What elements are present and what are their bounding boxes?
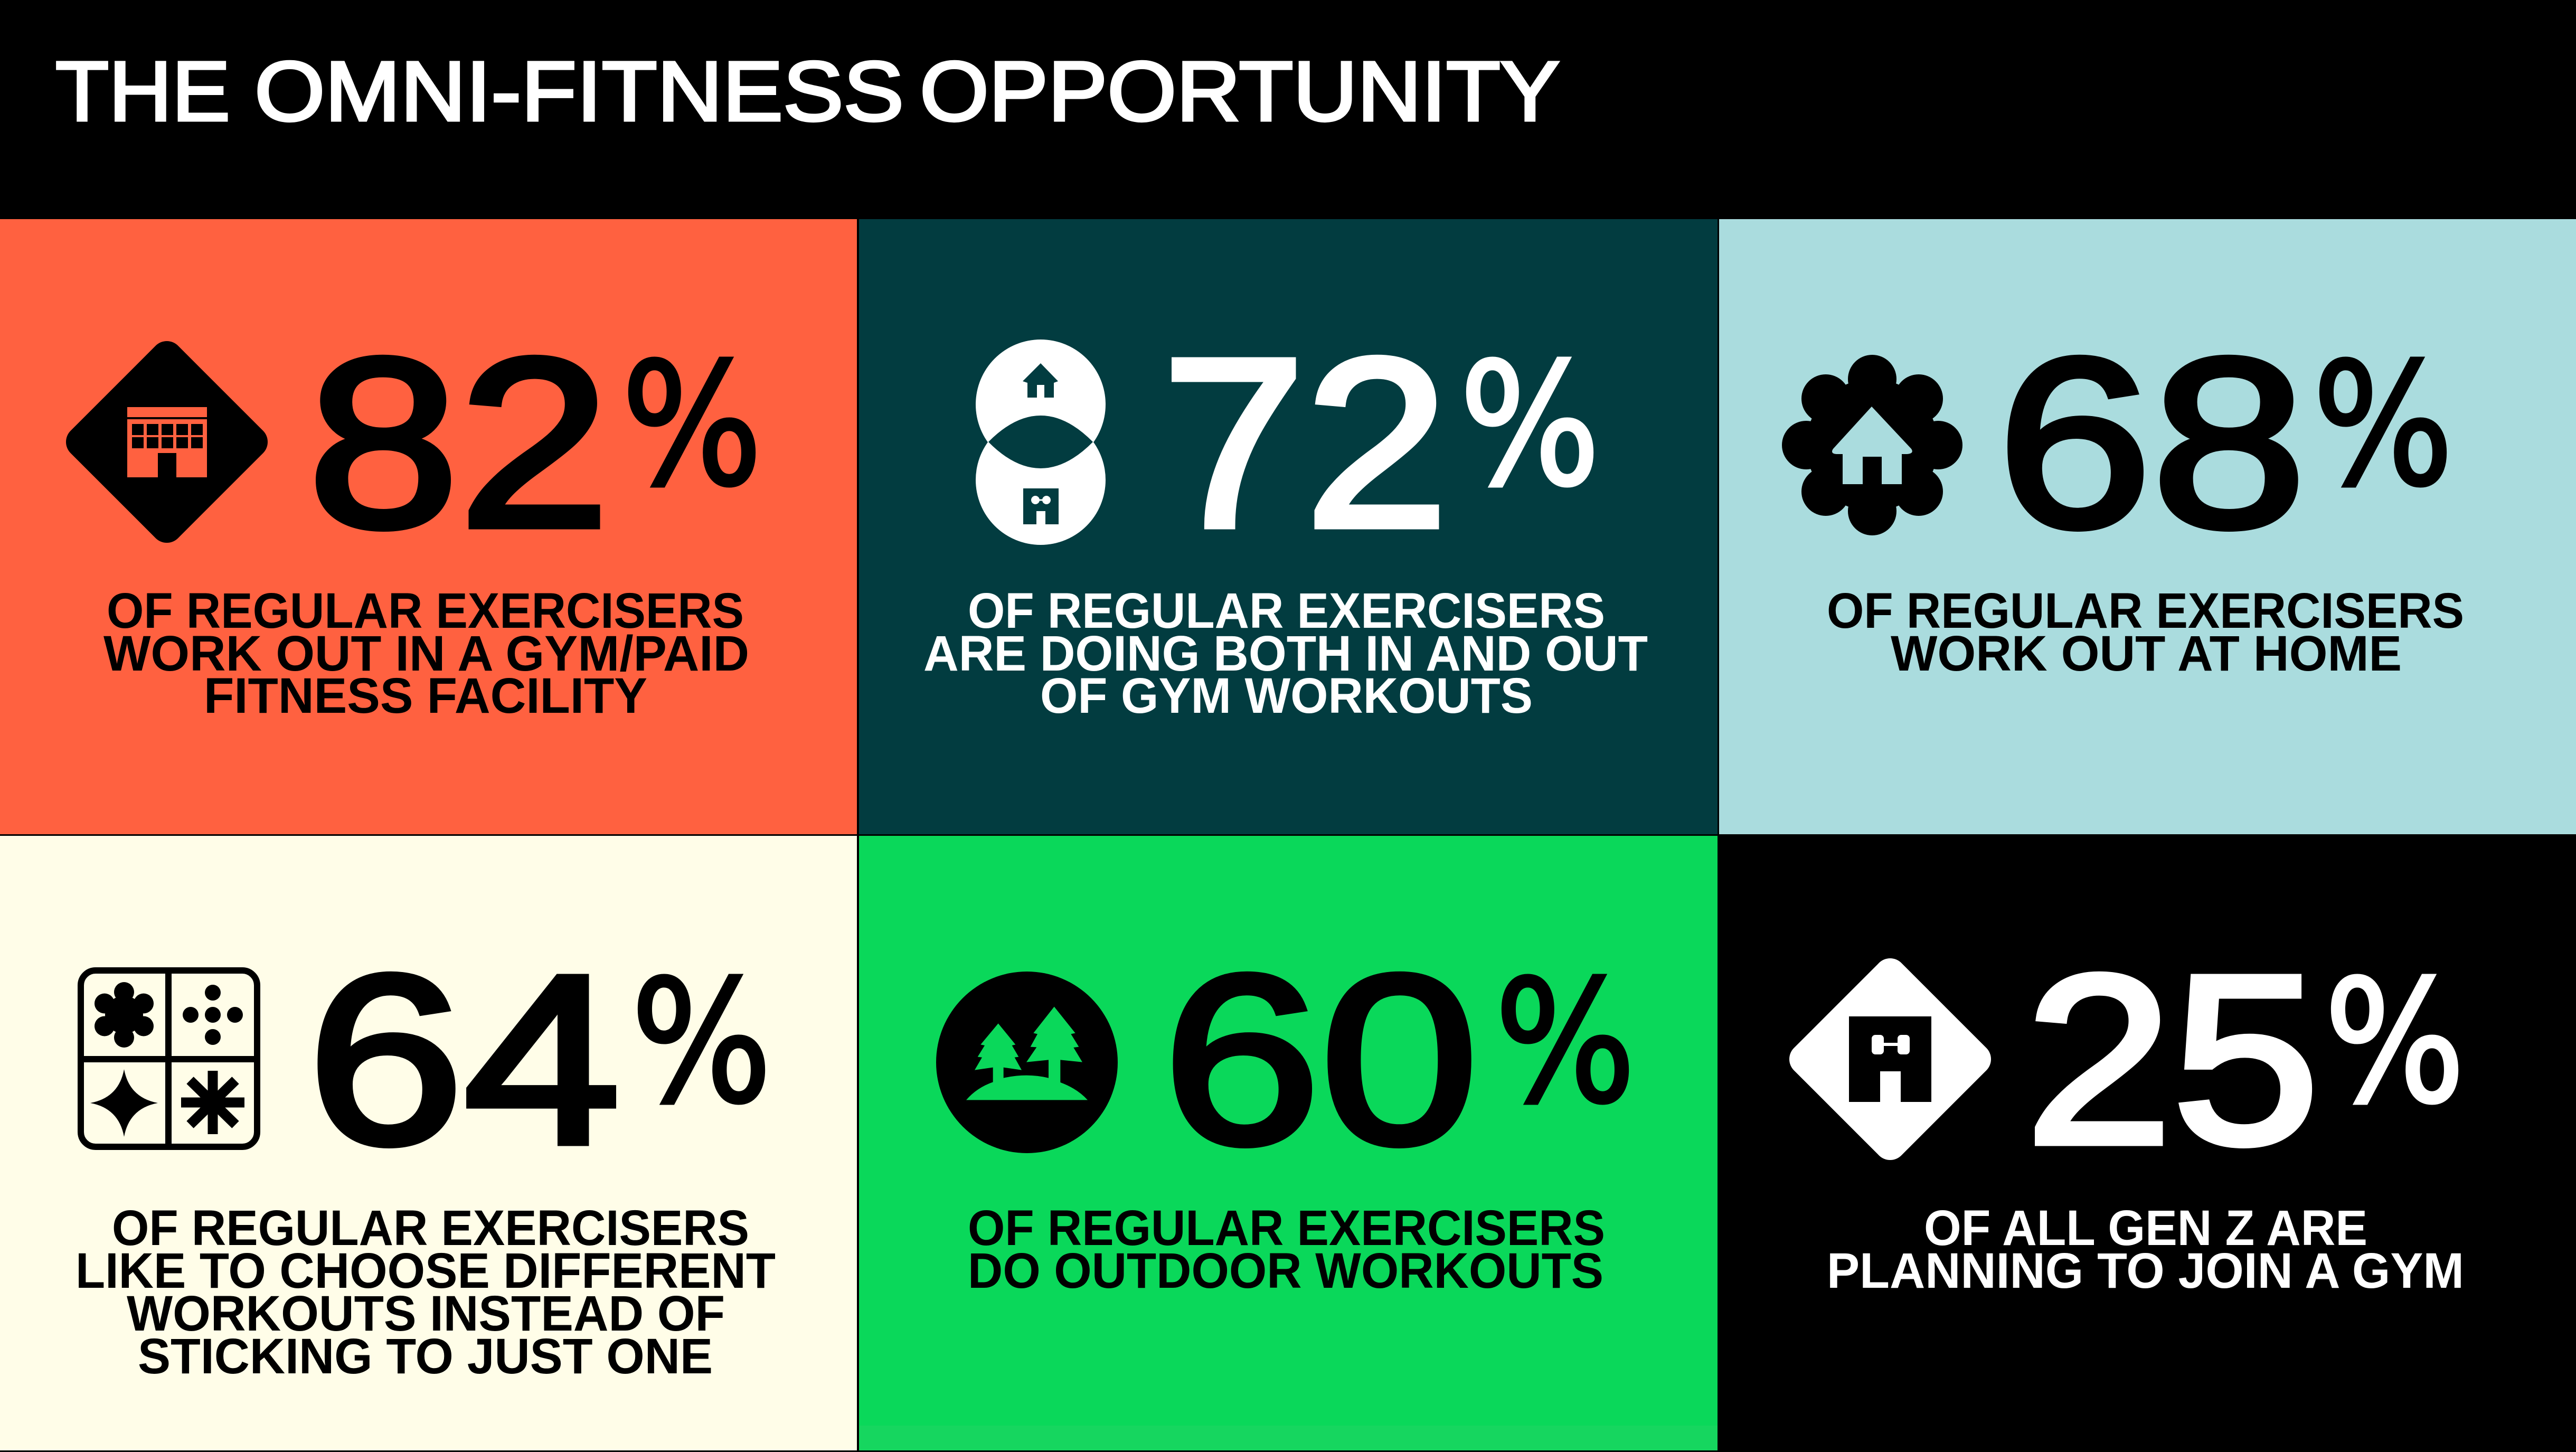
- percent sign: %: [621, 327, 762, 524]
- icon: flower with house: [1782, 355, 1962, 535]
- panel: 60% outdoor: [859, 836, 1718, 1450]
- statistic: 68: 68: [1997, 309, 2306, 577]
- panel: 25% Gen Z: [1719, 836, 2576, 1450]
- caption: [76, 1200, 776, 1384]
- caption: [103, 583, 749, 724]
- icon: gym building diamond: [82, 357, 252, 527]
- percent sign: %: [2324, 945, 2465, 1141]
- caption: ARE DOING BOTH IN AND OUT: [923, 626, 1648, 682]
- caption: WORKOUTS INSTEAD OF: [127, 1286, 725, 1342]
- caption: OF ALL GEN Z ARE: [1924, 1200, 2367, 1256]
- caption: [968, 1200, 1605, 1299]
- caption: [1827, 1200, 2464, 1299]
- statistic: 60: 60: [1163, 926, 1478, 1194]
- title: [55, 44, 1560, 138]
- caption: WORK OUT AT HOME: [1891, 626, 2402, 682]
- caption: [923, 583, 1648, 724]
- statistic: 82: 82: [308, 309, 610, 577]
- statistic: 64: 64: [307, 926, 620, 1194]
- caption: [1827, 583, 2464, 682]
- icon: gym diamond: [1805, 974, 1975, 1144]
- caption: OF REGULAR EXERCISERS: [968, 1200, 1605, 1256]
- title: OPPORTUNITY: [920, 44, 1560, 138]
- icon: four-part grid of shapes: [78, 967, 260, 1150]
- caption: DO OUTDOOR WORKOUTS: [968, 1243, 1603, 1299]
- percent sign: %: [1495, 945, 1636, 1141]
- panel: 64% variety: [0, 836, 857, 1450]
- caption: FITNESS FACILITY: [204, 668, 647, 724]
- caption: PLANNING TO JOIN A GYM: [1827, 1243, 2464, 1299]
- icon: venn of home and gym: [976, 340, 1106, 545]
- icon: trees in circle: [936, 972, 1118, 1153]
- statistic: 25: 25: [2025, 926, 2319, 1194]
- caption: OF REGULAR EXERCISERS: [107, 583, 744, 639]
- percent sign: %: [1459, 327, 1600, 524]
- caption: OF REGULAR EXERCISERS: [112, 1200, 749, 1256]
- caption: STICKING TO JUST ONE: [138, 1328, 713, 1384]
- panel: 72% both: [859, 219, 1718, 834]
- caption: OF REGULAR EXERCISERS: [1827, 583, 2464, 639]
- percent sign: %: [2313, 327, 2454, 524]
- panel: 68% at home: [1719, 219, 2576, 834]
- title: THE: [55, 44, 230, 138]
- title: OMNI-FITNESS: [254, 44, 904, 138]
- caption: OF REGULAR EXERCISERS: [968, 583, 1605, 639]
- caption: LIKE TO CHOOSE DIFFERENT: [76, 1243, 776, 1299]
- panel: 82% gym: [0, 219, 857, 834]
- statistic: 72: 72: [1162, 309, 1448, 577]
- caption: WORK OUT IN A GYM/PAID: [103, 626, 749, 682]
- percent sign: %: [631, 945, 772, 1141]
- caption: OF GYM WORKOUTS: [1040, 668, 1533, 724]
